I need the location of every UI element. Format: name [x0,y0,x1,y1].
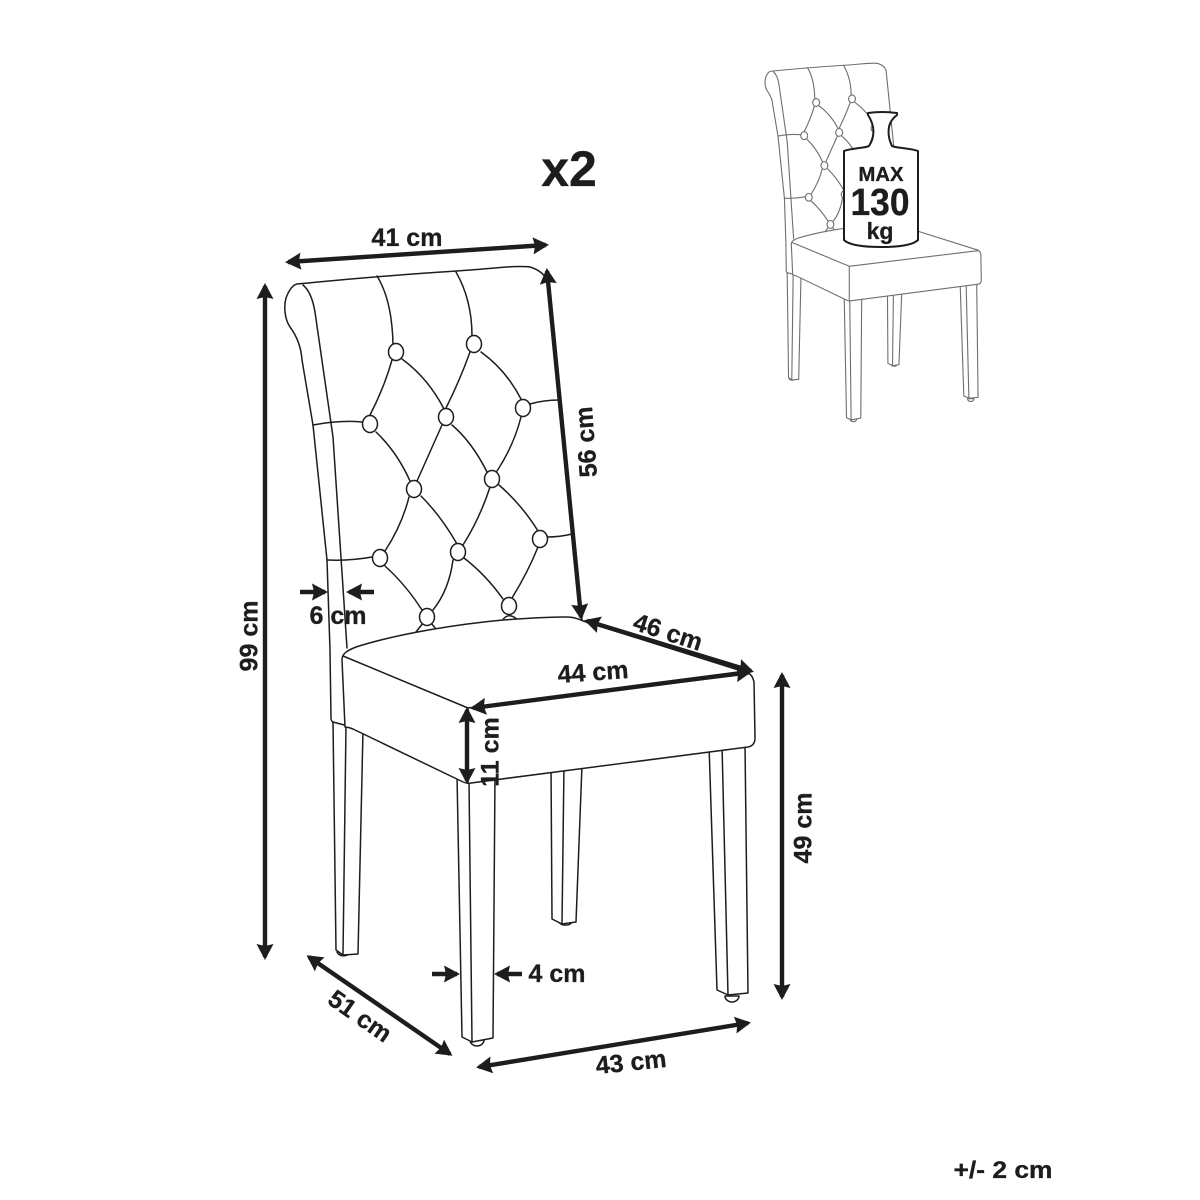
dimension: backrest height 56 cm [547,271,603,617]
quantity label: x2 [541,141,597,197]
dimension: backrest width 41 cm: 41 cm [372,224,442,252]
dimension: leg width 4 cm: 4 cm [529,960,585,988]
dimension: backrest width 41 cm [288,224,546,262]
dimension: leg span 43 cm: 43 cm [594,1045,668,1080]
small chair with weight limit [765,63,981,422]
icon: weight vase [844,112,918,247]
dimension: leg depth 51 cm [309,957,450,1054]
dimension: seat height 49 cm: 49 cm [790,793,818,863]
dimension: leg span 43 cm [479,1023,748,1080]
small chair outline [765,63,981,422]
dimension: backrest thickness 6 cm: 6 cm [310,602,366,630]
tolerance note: +/- 2 cm [954,1157,1052,1184]
dimension: seat depth 46 cm [587,608,751,671]
dimension: backrest thickness 6 cm [300,592,374,630]
dimension: seat thickness 11 cm [467,710,504,787]
dimension: seat width 44 cm: 44 cm [557,656,629,689]
dimension: backrest height 56 cm: 56 cm [570,406,603,478]
dimension: total height 99 cm: 99 cm [236,601,264,671]
dimension: seat width 44 cm [473,656,749,708]
weight limit label: MAX [858,164,904,186]
main chair line drawing [285,266,755,1046]
dimension: seat thickness 11 cm: 11 cm [476,717,504,787]
weight limit label: kg [867,218,893,244]
dimension: seat depth 46 cm: 46 cm [630,608,706,657]
dimension: leg depth 51 cm: 51 cm [323,985,397,1048]
weight limit label [850,164,910,244]
weight limit label: 130 [850,182,910,224]
